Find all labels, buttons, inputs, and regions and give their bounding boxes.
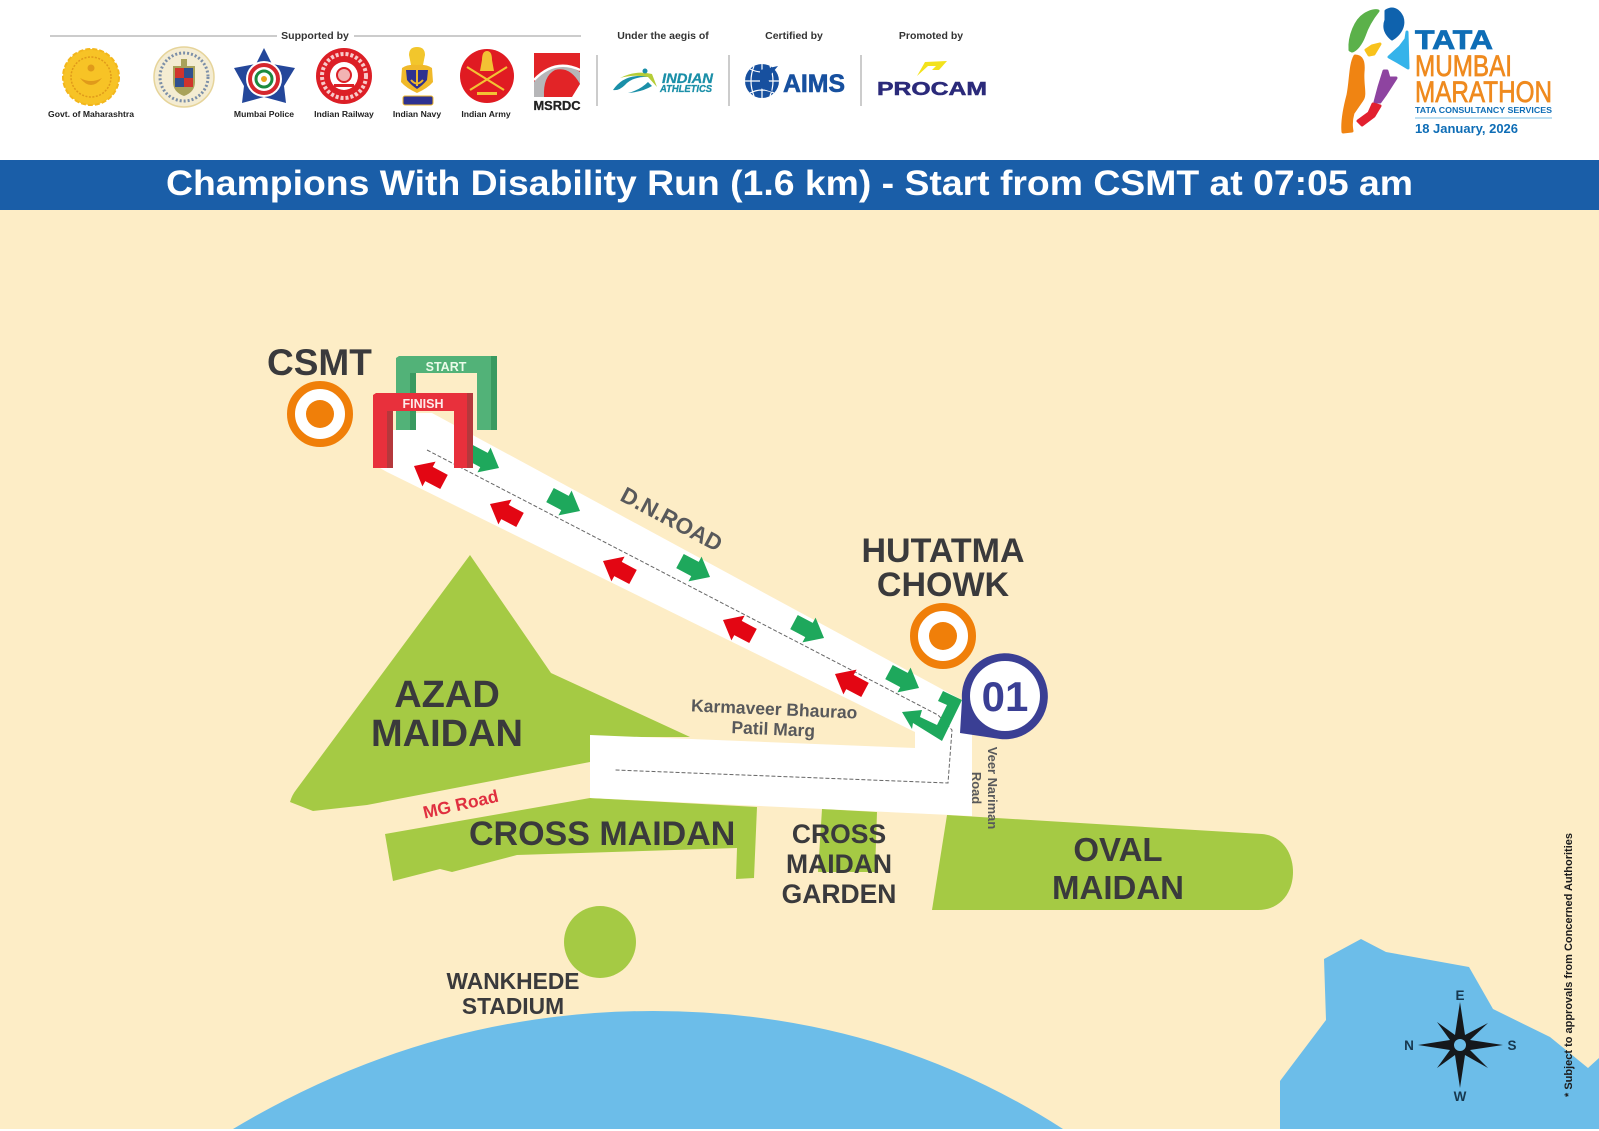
compass rose: S	[1507, 1038, 1517, 1053]
label: Oval Maidan: OVAL	[1073, 831, 1163, 868]
logo: Tata Mumbai Marathon	[1343, 9, 1552, 136]
park: Oval Maidan	[932, 815, 1293, 910]
label: Azad Maidan: AZAD	[394, 674, 500, 716]
label: Oval Maidan: MAIDAN	[1052, 869, 1184, 906]
label: Azad Maidan: MAIDAN	[371, 713, 523, 755]
water: Arabian Sea bay	[233, 1011, 1063, 1129]
start gate: START	[426, 360, 467, 374]
park: Cross Maidan	[385, 798, 757, 881]
green outbound arrows	[462, 440, 926, 700]
road label: Veer Nariman Road	[969, 747, 1000, 829]
disclaimer note: * Subject to approvals from Concerned Authorities	[1563, 833, 1575, 1097]
start gate	[396, 356, 497, 430]
logo: Indian Army	[460, 49, 514, 119]
road label: Karmaveer Bhaurao Patil Marg: Patil Marg	[731, 717, 815, 741]
label: Wankhede Stadium: STADIUM	[462, 993, 564, 1019]
supported by label: Supported by	[281, 30, 349, 42]
kilometre pin 01: 01	[982, 673, 1028, 720]
logo: Procam: Promoted by	[899, 30, 963, 42]
logo: Procam: PROCAM	[877, 79, 987, 99]
logo: Indian Athletics: Under the aegis of	[617, 30, 709, 42]
title banner	[0, 160, 1599, 210]
logo: Procam	[877, 30, 987, 99]
compass rose: N	[1404, 1038, 1414, 1053]
logo: Indian Athletics	[613, 30, 714, 95]
label: Wankhede Stadium: WANKHEDE	[446, 968, 580, 994]
road label: Karmaveer Bhaurao Patil Marg: Karmaveer Bhaurao	[691, 695, 858, 723]
logo: MSRDC	[534, 53, 581, 113]
runner figure	[1343, 9, 1408, 132]
logo: Indian Navy	[393, 47, 441, 119]
wordmark: TATA	[1415, 25, 1493, 55]
label: Oval Maidan	[1052, 831, 1184, 906]
logo: Indian Navy: Indian Navy	[393, 109, 441, 119]
label: Azad Maidan	[371, 674, 523, 755]
park: Wankhede Stadium	[564, 906, 636, 978]
marker: CSMT: CSMT	[267, 342, 372, 383]
logo: Tata Mumbai Marathon: TATA CONSULTANCY SERVICES	[1415, 105, 1552, 115]
logo: AIMS	[745, 30, 845, 98]
green U-turn arrow	[902, 691, 962, 741]
road label: D.N. Road: D.N.ROAD	[617, 482, 727, 557]
marker: Hutatma Chowk	[861, 532, 1025, 665]
marker: Hutatma Chowk: HUTATMA	[861, 532, 1025, 570]
logo: Indian Athletics: ATHLETICS	[659, 84, 712, 95]
marker: Hutatma Chowk: CHOWK	[877, 566, 1010, 604]
logo: AIMS: Certified by	[765, 30, 823, 42]
road label: MG Road: MG Road	[421, 786, 500, 823]
label: Cross Maidan Garden: CROSS	[792, 819, 886, 849]
logo: Indian Army: Indian Army	[461, 109, 511, 119]
logo: Indian Railway: Indian Railway	[314, 109, 374, 119]
road label: Veer Nariman Road: Road	[969, 772, 984, 804]
label: Wankhede Stadium	[446, 968, 580, 1019]
logo: Tata Mumbai Marathon: MUMBAI	[1415, 50, 1512, 83]
logo: MSRDC: MSRDC	[534, 98, 581, 113]
road label: Veer Nariman Road: Veer Nariman	[985, 747, 1000, 829]
logo: Govt. of Maharashtra	[48, 49, 134, 119]
logo: municipal corporation	[154, 47, 214, 107]
red return arrows	[407, 454, 872, 702]
label: Cross Maidan Garden: GARDEN	[782, 879, 896, 909]
title banner: Champions With Disability Run (1.6 km) - Start from CSMT at 07:05 am	[166, 164, 1413, 203]
finish gate	[373, 393, 473, 468]
park: Azad Maidan	[290, 555, 690, 811]
label: Cross Maidan: CROSS MAIDAN	[469, 815, 735, 853]
route dashed centre line	[427, 450, 952, 783]
logo: Indian Railway	[314, 48, 374, 119]
route road	[380, 413, 972, 816]
logo: Govt. of Maharashtra: Govt. of Maharashtra	[48, 109, 134, 119]
logo: Mumbai Police	[234, 48, 295, 119]
water: harbour	[1280, 939, 1599, 1129]
header: partner logos	[48, 30, 581, 119]
label: Cross Maidan Garden: MAIDAN	[786, 849, 892, 879]
logo: Mumbai Police: Mumbai Police	[234, 109, 294, 119]
compass rose: W	[1454, 1089, 1467, 1104]
logo: Indian Athletics: INDIAN	[662, 70, 714, 86]
finish gate: FINISH	[403, 397, 443, 411]
road label: Karmaveer Bhaurao Patil Marg	[691, 695, 858, 741]
marker: CSMT	[267, 342, 372, 443]
compass rose	[1404, 988, 1517, 1104]
compass rose: E	[1455, 988, 1465, 1003]
label: Cross Maidan Garden	[782, 819, 896, 909]
logo: AIMS: AIMS	[783, 70, 845, 98]
logo: Tata Mumbai Marathon: 18 January, 2026	[1415, 121, 1518, 136]
kilometre pin 01	[960, 653, 1048, 739]
logo: Tata Mumbai Marathon: MARATHON	[1415, 76, 1552, 109]
park: Cross Maidan Garden	[818, 809, 877, 872]
